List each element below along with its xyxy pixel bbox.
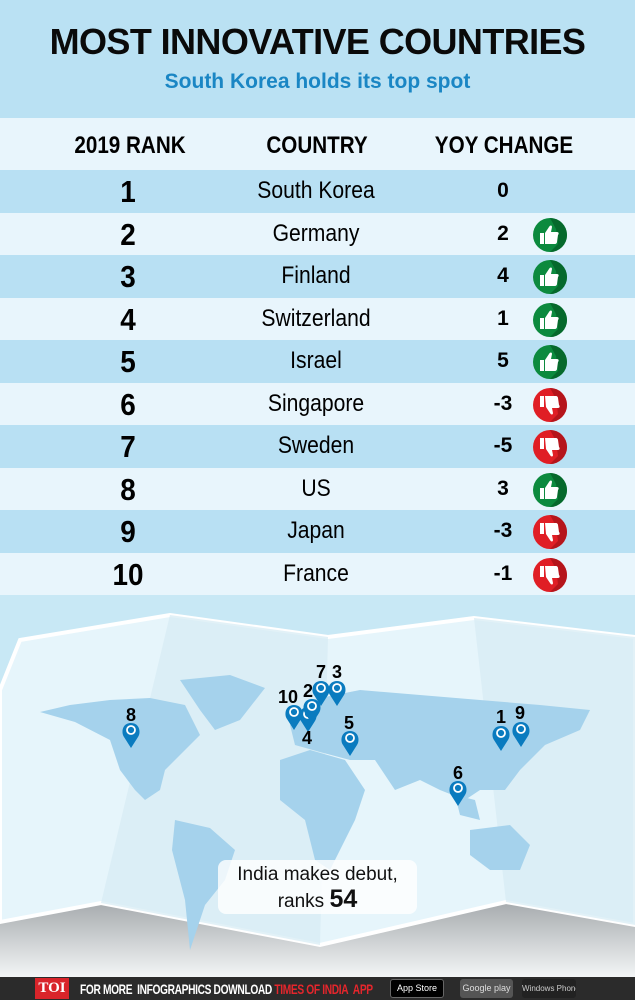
pin 9: 9 xyxy=(515,703,525,723)
row 1: South Korea xyxy=(257,177,375,204)
app badges xyxy=(390,979,444,998)
pin 1 xyxy=(492,707,510,751)
TOI logo xyxy=(35,978,69,999)
callout: India: ranks 54 xyxy=(278,885,357,913)
pin 6: 6 xyxy=(453,763,463,783)
row 8: US xyxy=(301,474,331,502)
pin 2: 2 xyxy=(303,681,313,701)
row 6: Singapore xyxy=(268,390,364,416)
row 4: Switzerland xyxy=(261,304,371,332)
row 10 xyxy=(0,552,635,595)
row 7: -5 xyxy=(494,434,512,457)
column headers: YOY CHANGE xyxy=(435,132,573,159)
footer: Google play xyxy=(462,983,511,993)
row 9: -3 xyxy=(494,519,512,542)
pin 2 xyxy=(303,681,321,724)
pin 8: 8 xyxy=(126,705,136,725)
row 8: 8 xyxy=(120,472,136,506)
row 2: 2 xyxy=(120,216,136,252)
title: MOST INNOVATIVE COUNTRIES xyxy=(50,21,585,62)
column headers: 2019 RANK xyxy=(74,132,186,159)
app badges: App Store xyxy=(397,983,437,993)
pin 5 xyxy=(341,713,359,756)
pin 7 xyxy=(312,662,330,706)
TOI logo: TOI xyxy=(38,980,66,996)
pin 4 xyxy=(299,707,317,748)
row 1: 1 xyxy=(120,174,136,209)
row 3: 4 xyxy=(497,264,509,287)
pin 7: 7 xyxy=(316,662,326,682)
row 3 xyxy=(0,255,635,298)
row 7: Sweden xyxy=(278,432,354,459)
row 10: France xyxy=(283,560,349,586)
row 5: 5 xyxy=(120,344,136,379)
column headers: COUNTRY xyxy=(266,132,368,159)
row 6 xyxy=(0,382,635,425)
map xyxy=(0,595,635,977)
row 7 xyxy=(0,425,635,468)
row 4: 1 xyxy=(497,306,509,330)
row 10: 10 xyxy=(112,556,144,592)
header background xyxy=(0,0,635,118)
row 5 xyxy=(0,340,635,382)
row 8: 3 xyxy=(497,476,509,500)
row 8 xyxy=(0,468,635,510)
row 9: 9 xyxy=(120,514,136,549)
row 10: -1 xyxy=(494,562,512,584)
row 2 xyxy=(0,212,635,255)
pin 3: 3 xyxy=(332,662,342,682)
pin 8 xyxy=(122,705,140,748)
pin 1: 1 xyxy=(496,707,506,727)
pin 5: 5 xyxy=(344,713,354,733)
row 1: 0 xyxy=(497,179,509,202)
callout: India: India makes debut, xyxy=(237,864,398,885)
row 2: Germany xyxy=(273,220,359,246)
row 1 xyxy=(0,170,635,212)
row 5: 5 xyxy=(497,349,509,372)
row 3: 3 xyxy=(120,259,136,294)
row 9: Japan xyxy=(287,517,345,544)
row 2: 2 xyxy=(497,222,509,244)
pin 10: 10 xyxy=(278,687,298,707)
footer text: FOR MORE INFOGRAPHICS DOWNLOAD TIMES OF INDIA APP xyxy=(80,981,373,997)
row 4 xyxy=(0,298,635,340)
callout: India xyxy=(218,860,417,914)
row 4: 4 xyxy=(120,302,136,336)
pin 10 xyxy=(278,687,303,730)
footer xyxy=(0,977,635,1000)
pin 4: 4 xyxy=(302,728,312,748)
subtitle: South Korea holds its top spot xyxy=(165,70,470,93)
row 7: 7 xyxy=(120,429,136,464)
pins xyxy=(122,662,530,806)
pin 3 xyxy=(328,662,346,706)
row 3: Finland xyxy=(281,262,351,289)
row 6: -3 xyxy=(494,392,512,414)
row 5: Israel xyxy=(290,347,342,374)
pin 9 xyxy=(512,703,530,747)
pin 6 xyxy=(449,763,467,806)
row 9 xyxy=(0,510,635,552)
column headers xyxy=(0,118,635,170)
row 6: 6 xyxy=(120,386,136,422)
